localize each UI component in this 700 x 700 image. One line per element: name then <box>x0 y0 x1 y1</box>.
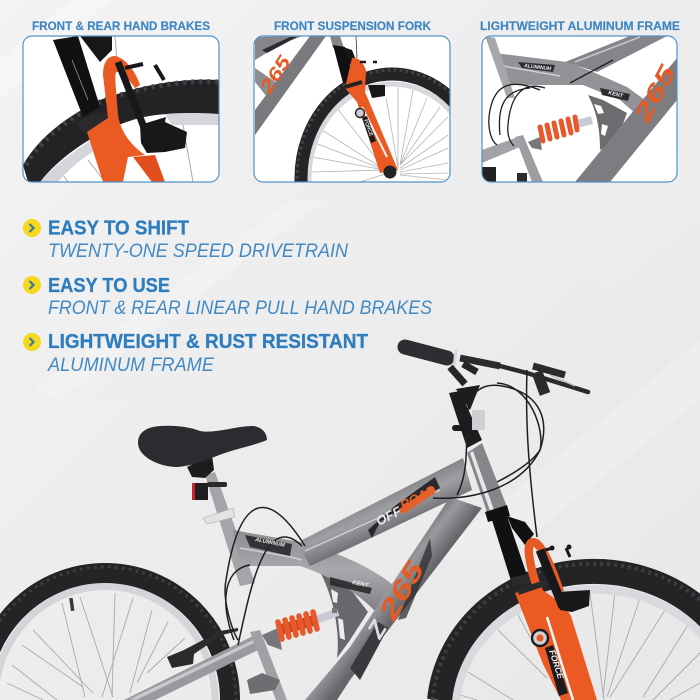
down tube <box>255 36 326 135</box>
heading: easy to shift: EASY TO SHIFT <box>48 218 189 240</box>
cable barrels <box>125 64 164 80</box>
brake cable <box>115 36 117 62</box>
main bike decal lettering: ALUMINUM <box>254 537 286 549</box>
hoop highlight <box>240 548 302 560</box>
265 decal: 265 <box>629 60 682 128</box>
chainstay <box>482 137 520 163</box>
front brake <box>540 544 590 612</box>
top tube highlight <box>575 37 640 62</box>
badge text: FORCE <box>362 119 374 138</box>
tire <box>23 80 219 182</box>
panel photo: brakes <box>23 36 219 182</box>
heading: lightweight and rust resistant: LIGHTWEIGHT & RUST RESISTANT <box>48 331 368 353</box>
main bicycle photo illustration <box>0 347 700 700</box>
panel: front and rear hand brakes <box>23 21 219 182</box>
panel: front suspension fork <box>253 21 451 183</box>
main bike decal lettering: 265 <box>373 555 431 626</box>
badge strip <box>362 116 376 143</box>
main bike decal lettering: Z <box>362 615 394 644</box>
brake cluster <box>140 117 187 153</box>
main bike decal lettering: OFF <box>374 503 404 529</box>
seat stay <box>515 135 543 182</box>
seat tube <box>205 472 255 586</box>
heading: easy to use: EASY TO USE <box>48 275 170 297</box>
seat clamp white <box>203 508 235 524</box>
cable <box>356 36 357 58</box>
cables <box>489 60 613 146</box>
orange fork <box>87 56 145 182</box>
rear shock with orange spring <box>278 608 338 639</box>
hoop highlight <box>503 66 560 76</box>
main bike decal lettering <box>254 482 566 680</box>
kent decal: KENT <box>608 90 624 100</box>
cable barrels <box>360 61 377 63</box>
subheading: aluminum frame: ALUMINUM FRAME <box>47 354 215 376</box>
down tube decal: 265 <box>256 52 296 99</box>
seat post reflector <box>187 455 227 500</box>
derailleur <box>517 173 527 182</box>
panel photo: frame <box>482 36 682 183</box>
panel photo: fork <box>253 35 451 183</box>
rubber seal <box>85 117 108 125</box>
down tube <box>305 497 482 700</box>
shock body <box>577 120 592 124</box>
seat tube <box>485 36 515 98</box>
aluminum decal: ALUMINUM <box>523 63 552 72</box>
tire tread <box>296 68 450 179</box>
frame decal splatters <box>245 477 440 680</box>
brake arm <box>118 62 147 135</box>
subheading: brakes: FRONT & REAR LINEAR PULL HAND BRAKES <box>48 297 432 319</box>
brake and shift cables <box>225 370 544 645</box>
handlebar <box>405 347 588 394</box>
decal on top tube <box>262 37 297 53</box>
fork arch black <box>345 48 356 65</box>
feature: lightweight and rust resistant <box>23 331 368 376</box>
panel: lightweight aluminum frame <box>480 21 682 183</box>
curved frame hoop <box>233 530 394 612</box>
top tube <box>255 36 303 60</box>
spokes <box>63 125 193 182</box>
subheading: drivetrain: TWENTY-ONE SPEED DRIVETRAIN <box>48 240 349 262</box>
stanchion <box>333 45 350 83</box>
orange fork second leg <box>133 155 165 182</box>
orange spring <box>540 117 577 141</box>
fork top arch black <box>80 36 112 62</box>
front fork stanchion <box>485 505 534 584</box>
top tube highlight <box>305 490 440 551</box>
chainstay and seat stay <box>124 628 287 700</box>
feature: easy to use <box>23 275 432 319</box>
stem <box>449 385 485 448</box>
orange fork <box>345 58 398 173</box>
spokes <box>312 87 448 182</box>
kent decal <box>600 88 630 101</box>
panel title: fork: FRONT SUSPENSION FORK <box>274 21 432 33</box>
brake <box>368 85 385 98</box>
front wheel <box>432 564 700 700</box>
dropout <box>384 166 396 178</box>
bottom tire <box>482 167 496 183</box>
shock plate <box>588 95 627 150</box>
main bike decal lettering: FORCE <box>547 649 566 680</box>
aluminum decal <box>518 62 555 72</box>
shock bracket <box>320 572 368 658</box>
fork slit <box>362 107 387 157</box>
panel title: brakes: FRONT & REAR HAND BRAKES <box>32 21 210 33</box>
hoop tube <box>255 68 277 97</box>
rim <box>308 82 450 182</box>
fork badge <box>532 630 568 696</box>
stanchion <box>53 36 100 117</box>
rear wheel <box>0 567 236 700</box>
head tube <box>467 443 507 512</box>
tire tread <box>26 82 219 165</box>
top tube <box>302 458 472 566</box>
main bike decal lettering: KENT <box>352 580 370 590</box>
rear brake and derailleur <box>167 628 280 694</box>
head tube <box>330 36 344 48</box>
shock plate holes <box>594 104 608 136</box>
main bike decal lettering: ROAD <box>398 482 439 513</box>
top tube <box>565 36 667 72</box>
panel title: frame: LIGHTWEIGHT ALUMINUM FRAME <box>480 21 680 33</box>
stanchion highlight <box>72 60 88 100</box>
badge <box>356 108 364 118</box>
rear bracket <box>528 137 542 150</box>
feature: easy to shift <box>23 218 349 262</box>
icon: yellow chevron bullet <box>23 276 41 294</box>
orange fork <box>515 542 597 700</box>
tire <box>294 68 450 182</box>
icon: yellow chevron bullet <box>23 219 41 237</box>
rim <box>40 112 219 182</box>
hoop <box>495 53 645 115</box>
saddle <box>138 426 267 467</box>
icon: yellow chevron bullet <box>23 333 41 351</box>
down tube <box>575 58 677 182</box>
seal <box>345 82 362 87</box>
